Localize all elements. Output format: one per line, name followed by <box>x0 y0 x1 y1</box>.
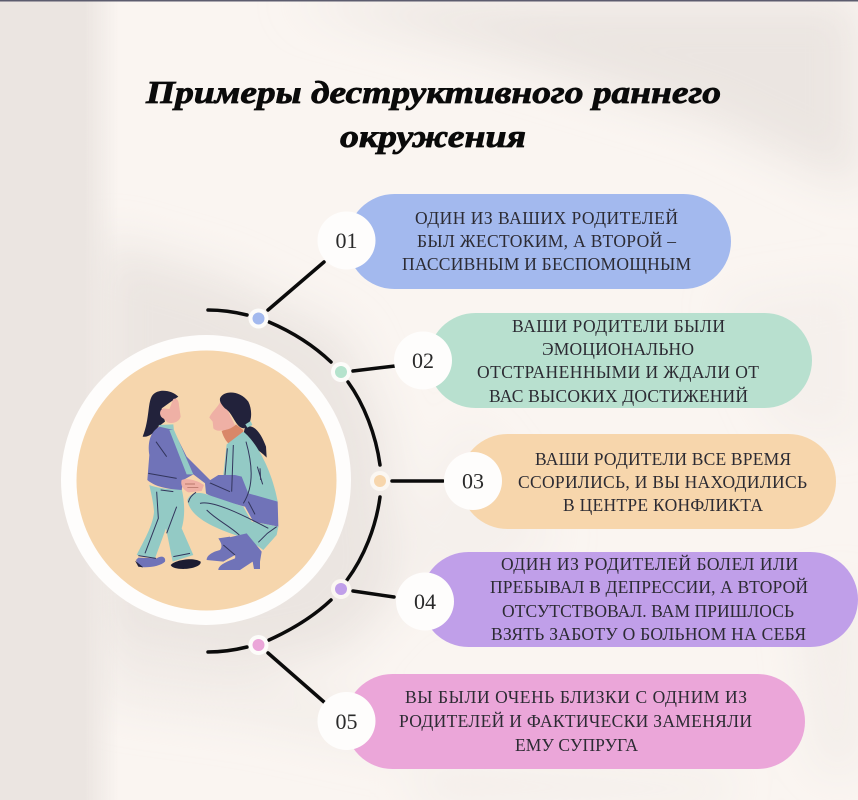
item 01: 01 <box>336 228 358 253</box>
title <box>145 74 721 154</box>
item 04: ОДИН ИЗ РОДИТЕЛЕЙ БОЛЕЛ ИЛИ <box>501 554 798 574</box>
item 02: ВАС ВЫСОКИХ ДОСТИЖЕНИЙ <box>489 386 748 406</box>
item 03: ВАШИ РОДИТЕЛИ ВСЕ ВРЕМЯ <box>535 449 791 469</box>
item 02: ЭМОЦИОНАЛЬНО <box>542 339 694 359</box>
title: окружения <box>340 118 526 154</box>
item 05: 05 <box>336 709 358 734</box>
item 05: РОДИТЕЛЕЙ И ФАКТИЧЕСКИ ЗАМЕНЯЛИ <box>399 711 752 731</box>
item 02 <box>394 313 812 408</box>
item 02: ВАШИ РОДИТЕЛИ БЫЛИ <box>512 316 725 336</box>
central circle with illustration <box>61 335 351 625</box>
item 04: ОТСУТСТВОВАЛ. ВАМ ПРИШЛОСЬ <box>502 601 794 621</box>
item 04 <box>396 552 858 647</box>
connector lines <box>268 262 443 702</box>
item 03: В ЦЕНТРЕ КОНФЛИКТА <box>563 495 763 515</box>
item 01: БЫЛ ЖЕСТОКИМ, А ВТОРОЙ – <box>417 231 676 251</box>
item 01 <box>318 194 731 289</box>
item 03: 03 <box>462 468 484 494</box>
title: Примеры деструктивного раннего <box>145 74 721 110</box>
item 04: 04 <box>414 589 436 614</box>
item 02: 02 <box>412 348 434 373</box>
illustration: mother <box>187 392 278 570</box>
item 01: ОДИН ИЗ ВАШИХ РОДИТЕЛЕЙ <box>415 208 678 228</box>
item 03: ССОРИЛИСЬ, И ВЫ НАХОДИЛИСЬ <box>518 472 807 492</box>
item 04: ПРЕБЫВАЛ В ДЕПРЕССИИ, А ВТОРОЙ <box>490 577 808 597</box>
arc timeline <box>208 310 380 652</box>
item 05 <box>318 674 805 769</box>
item 03 <box>444 434 836 529</box>
item 01: ПАССИВНЫМ И БЕСПОМОЩНЫМ <box>402 254 691 274</box>
timeline dots <box>248 308 390 655</box>
item 05: ВЫ БЫЛИ ОЧЕНЬ БЛИЗКИ С ОДНИМ ИЗ <box>405 687 747 707</box>
illustration: child <box>135 391 212 569</box>
item 02: ОТСТРАНЕННЫМИ И ЖДАЛИ ОТ <box>477 362 759 382</box>
item 05: ЕМУ СУПРУГА <box>515 735 638 755</box>
item 04: ВЗЯТЬ ЗАБОТУ О БОЛЬНОМ НА СЕБЯ <box>491 624 806 644</box>
